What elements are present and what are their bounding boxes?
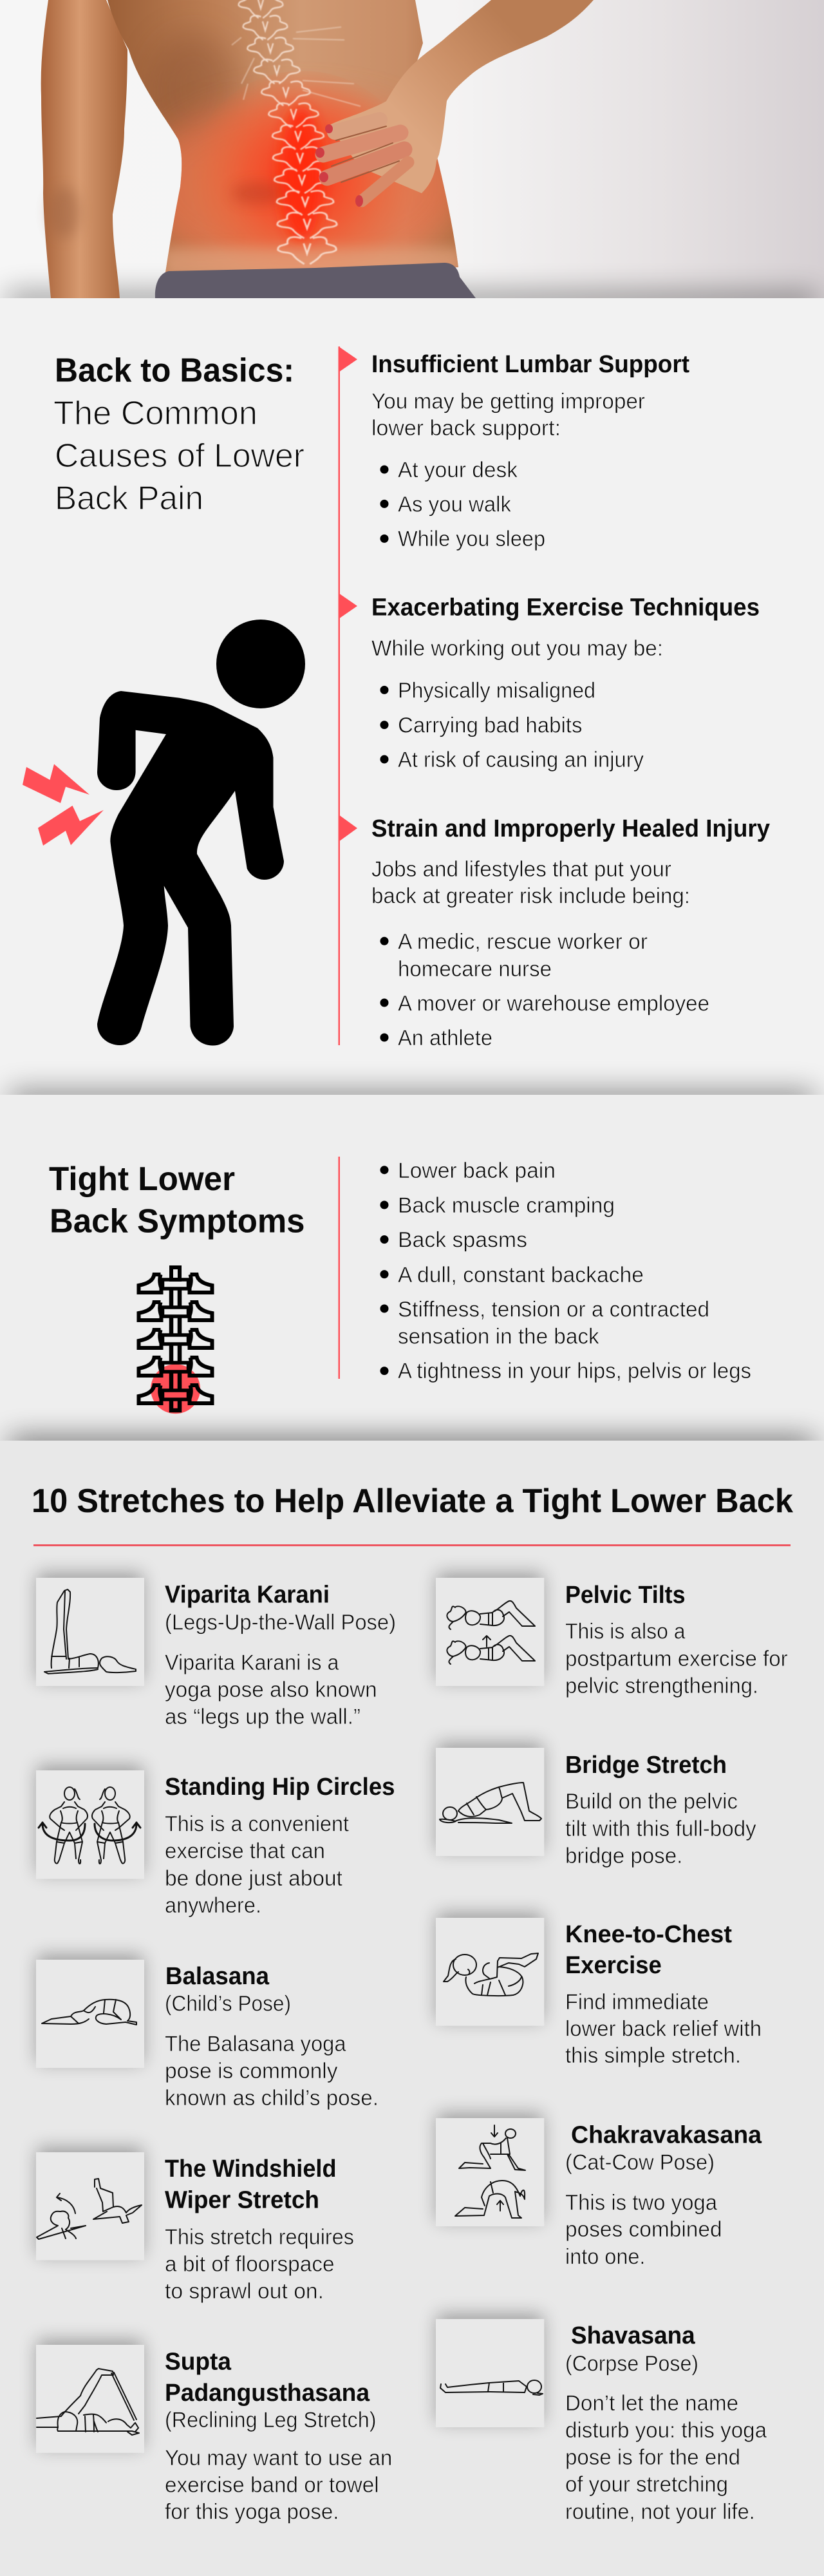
stretch: Supta Padangusthasana: Padangusthasana	[165, 2380, 370, 2407]
stretch: Standing Hip Circles: This is a convenient	[165, 1812, 350, 1836]
stretch: Shavasana: (Corpse Pose)	[565, 2352, 698, 2376]
cause: insufficient lumbar support	[371, 351, 689, 551]
cause: strain and improperly healed injury: Strain and Improperly Healed Injury	[371, 815, 770, 842]
cause: exacerbating exercise techniques	[371, 594, 760, 772]
illustration: child's pose	[42, 2000, 136, 2025]
cause: strain and improperly healed injury: A medic, rescue worker or	[398, 930, 648, 954]
heading: Back Symptoms	[50, 1203, 305, 1240]
cause: exacerbating exercise techniques: Carrying bad habits	[398, 714, 582, 738]
cause: exacerbating exercise techniques: While working out you may be:	[371, 636, 663, 661]
illustration: legs up the wall	[44, 1589, 136, 1674]
heading	[49, 1160, 305, 1240]
stretch: Standing Hip Circles	[36, 1766, 395, 1918]
stretch: Pelvic Tilts: pelvic strengthening.	[565, 1674, 758, 1698]
spine outline	[232, 0, 360, 264]
stretch: Supta Padangusthasana	[36, 2340, 392, 2524]
stretch: Pelvic Tilts: This is also a	[565, 1620, 686, 1644]
stretch: Standing Hip Circles: exercise that can	[165, 1839, 325, 1864]
stretch: Knee-to-Chest Exercise: Find immediate	[565, 1990, 709, 2014]
title: 10 Stretches to Help Alleviate a Tight Lower Back	[32, 1482, 793, 1520]
cause: insufficient lumbar support: At your desk	[398, 458, 518, 482]
stretch: Balasana: (Child’s Pose)	[165, 1992, 291, 2016]
stretch: Bridge Stretch: tilt with this full-body	[565, 1817, 756, 1841]
stretch: Shavasana: of your stretching	[565, 2472, 728, 2497]
illustration: corpse pose	[440, 2380, 543, 2395]
heading	[53, 352, 304, 517]
stretch: Supta Padangusthasana: for this yoga pose.	[165, 2500, 339, 2524]
symptoms list: Lower back pain	[398, 1159, 556, 1183]
symptoms list: Back muscle cramping	[398, 1193, 615, 1218]
panel: 10 stretches	[0, 1441, 824, 2576]
stretch: Viparita Karani: Viparita Karani	[165, 1581, 330, 1608]
timeline divider with arrows	[339, 346, 357, 1045]
stretch: Balasana: The Balasana yoga	[165, 2032, 346, 2056]
fingers	[323, 120, 408, 201]
heading: Back to Basics:	[55, 352, 294, 390]
left arm	[41, 0, 127, 298]
stretch: Supta Padangusthasana: (Reclining Leg Stretch)	[165, 2408, 376, 2432]
stretch: Viparita Karani: as “legs up the wall.”	[165, 1705, 360, 1729]
stretch: Standing Hip Circles: Standing Hip Circles	[165, 1774, 395, 1801]
cause: insufficient lumbar support: As you walk	[398, 493, 512, 517]
stretch: Balasana: Balasana	[165, 1963, 270, 1990]
stretch: Knee-to-Chest Exercise: lower back relief with	[565, 2017, 762, 2041]
stretch: The Windshield Wiper Stretch: to sprawl out on.	[165, 2279, 324, 2304]
cause: exacerbating exercise techniques: Physically misaligned	[398, 679, 595, 703]
stretch: Supta Padangusthasana: Supta	[165, 2349, 232, 2376]
title rule	[33, 1544, 791, 1546]
stretch: Chakravakasana: This is two yoga	[565, 2191, 717, 2215]
cause: strain and improperly healed injury: An athlete	[398, 1026, 492, 1050]
stretch: The Windshield Wiper Stretch: a bit of floorspace	[165, 2252, 335, 2277]
stretch: Shavasana: disturb you: this yoga	[565, 2418, 767, 2443]
cause: insufficient lumbar support: You may be getting improper	[371, 390, 645, 414]
stretch: The Windshield Wiper Stretch: The Windshield	[165, 2155, 336, 2183]
torso	[108, 0, 458, 277]
stretch: Balasana	[36, 1955, 379, 2110]
symptoms list: Back spasms	[398, 1227, 527, 1252]
stretch: Knee-to-Chest Exercise: this simple stretch.	[565, 2043, 741, 2068]
stretch: The Windshield Wiper Stretch: Wiper Stretch	[165, 2187, 319, 2214]
stretch: Supta Padangusthasana: You may want to use an	[165, 2446, 392, 2470]
elbow shading	[49, 187, 80, 238]
heading: Back Pain	[55, 480, 203, 517]
stretch: Bridge Stretch: Bridge Stretch	[565, 1752, 727, 1779]
stretch: Chakravakasana: into one.	[565, 2245, 645, 2269]
icon: person holding back	[23, 620, 305, 1046]
illustration: cat-cow pose	[455, 2125, 525, 2218]
stretch: Viparita Karani: (Legs-Up-the-Wall Pose)	[165, 1610, 396, 1634]
illustration: reclining leg stretch	[37, 2369, 139, 2435]
icon: spine with red pain spot	[139, 1267, 212, 1414]
stretch: Shavasana: Don’t let the name	[565, 2391, 738, 2416]
stretch: Bridge Stretch: bridge pose.	[565, 1844, 682, 1868]
stretch: Bridge Stretch	[436, 1743, 756, 1868]
stretch: Knee-to-Chest Exercise: Knee-to-Chest	[565, 1921, 732, 1948]
stretch: Pelvic Tilts: postpartum exercise for	[565, 1647, 788, 1671]
heading: The Common	[53, 395, 258, 432]
symptoms list	[380, 1159, 751, 1383]
hero photo: back with glowing spine	[0, 0, 824, 312]
illustration: hip circles	[39, 1787, 140, 1864]
stretch: The Windshield Wiper Stretch	[36, 2148, 354, 2304]
cause: insufficient lumbar support: While you sleep	[398, 527, 545, 551]
stretch: Knee-to-Chest Exercise	[436, 1913, 762, 2068]
symptoms list: sensation in the back	[398, 1324, 600, 1349]
stretch: Chakravakasana	[436, 2114, 762, 2269]
illustration: windshield wiper	[37, 2179, 142, 2239]
cause: insufficient lumbar support: lower back support:	[371, 416, 561, 440]
stretch: Standing Hip Circles: be done just about	[165, 1866, 343, 1891]
stretch: Viparita Karani: yoga pose also known	[165, 1678, 377, 1702]
symptoms list: A dull, constant backache	[398, 1263, 644, 1287]
stretch: Chakravakasana: (Cat-Cow Pose)	[565, 2150, 715, 2175]
stretch: Knee-to-Chest Exercise: Exercise	[565, 1952, 662, 1979]
illustration: knee to chest	[444, 1953, 538, 1996]
illustration: bridge pose	[440, 1783, 541, 1823]
cause: exacerbating exercise techniques: Exacerbating Exercise Techniques	[371, 594, 760, 621]
symptoms list: A tightness in your hips, pelvis or legs	[398, 1359, 751, 1383]
stretch: Shavasana: Shavasana	[571, 2322, 695, 2349]
stretch: The Windshield Wiper Stretch: This stretch requires	[165, 2225, 354, 2249]
icon: pain lightning bolts	[23, 764, 104, 846]
stretch: Viparita Karani	[36, 1573, 396, 1729]
stretch: Chakravakasana: poses combined	[565, 2217, 722, 2242]
cause: strain and improperly healed injury: Jobs and lifestyles that put your	[371, 857, 671, 882]
cause: exacerbating exercise techniques: At risk of causing an injury	[398, 748, 644, 772]
stretch: Pelvic Tilts	[436, 1573, 788, 1698]
stretch: Shavasana: pose is for the end	[565, 2445, 740, 2470]
cause: strain and improperly healed injury: homecare nurse	[398, 957, 552, 981]
stretch: Shavasana	[436, 2315, 767, 2524]
panel: common causes of lower back pain	[0, 298, 824, 1112]
stretch: Chakravakasana: Chakravakasana	[571, 2122, 762, 2149]
stretch: Supta Padangusthasana: exercise band or towel	[165, 2473, 379, 2497]
cause: strain and improperly healed injury: back at greater risk include being:	[371, 884, 690, 908]
towel	[155, 263, 476, 298]
red pain glow	[142, 32, 464, 283]
right arm and hand	[328, 0, 594, 193]
stretch: Pelvic Tilts: Pelvic Tilts	[565, 1582, 685, 1609]
cause: strain and improperly healed injury	[371, 815, 770, 1050]
stretch: Standing Hip Circles: anywhere.	[165, 1893, 261, 1918]
finger nails	[315, 124, 363, 207]
cause: strain and improperly healed injury: A mover or warehouse employee	[398, 992, 709, 1016]
divider	[339, 1157, 340, 1379]
stretch: Balasana: known as child’s pose.	[165, 2086, 379, 2110]
illustration: pelvic tilts	[447, 1601, 535, 1664]
stretch: Viparita Karani: Viparita Karani is a	[165, 1651, 339, 1675]
stretch: Balasana: pose is commonly	[165, 2059, 337, 2083]
symptoms list: Stiffness, tension or a contracted	[398, 1297, 709, 1321]
stretch: Shavasana: routine, not your life.	[565, 2500, 755, 2524]
heading: Causes of Lower	[55, 437, 304, 475]
stretch: Bridge Stretch: Build on the pelvic	[565, 1790, 738, 1814]
panel: tight lower back symptoms	[0, 1157, 824, 1441]
heading: Tight Lower	[49, 1160, 235, 1198]
cause: insufficient lumbar support: Insufficient Lumbar Support	[371, 351, 689, 378]
